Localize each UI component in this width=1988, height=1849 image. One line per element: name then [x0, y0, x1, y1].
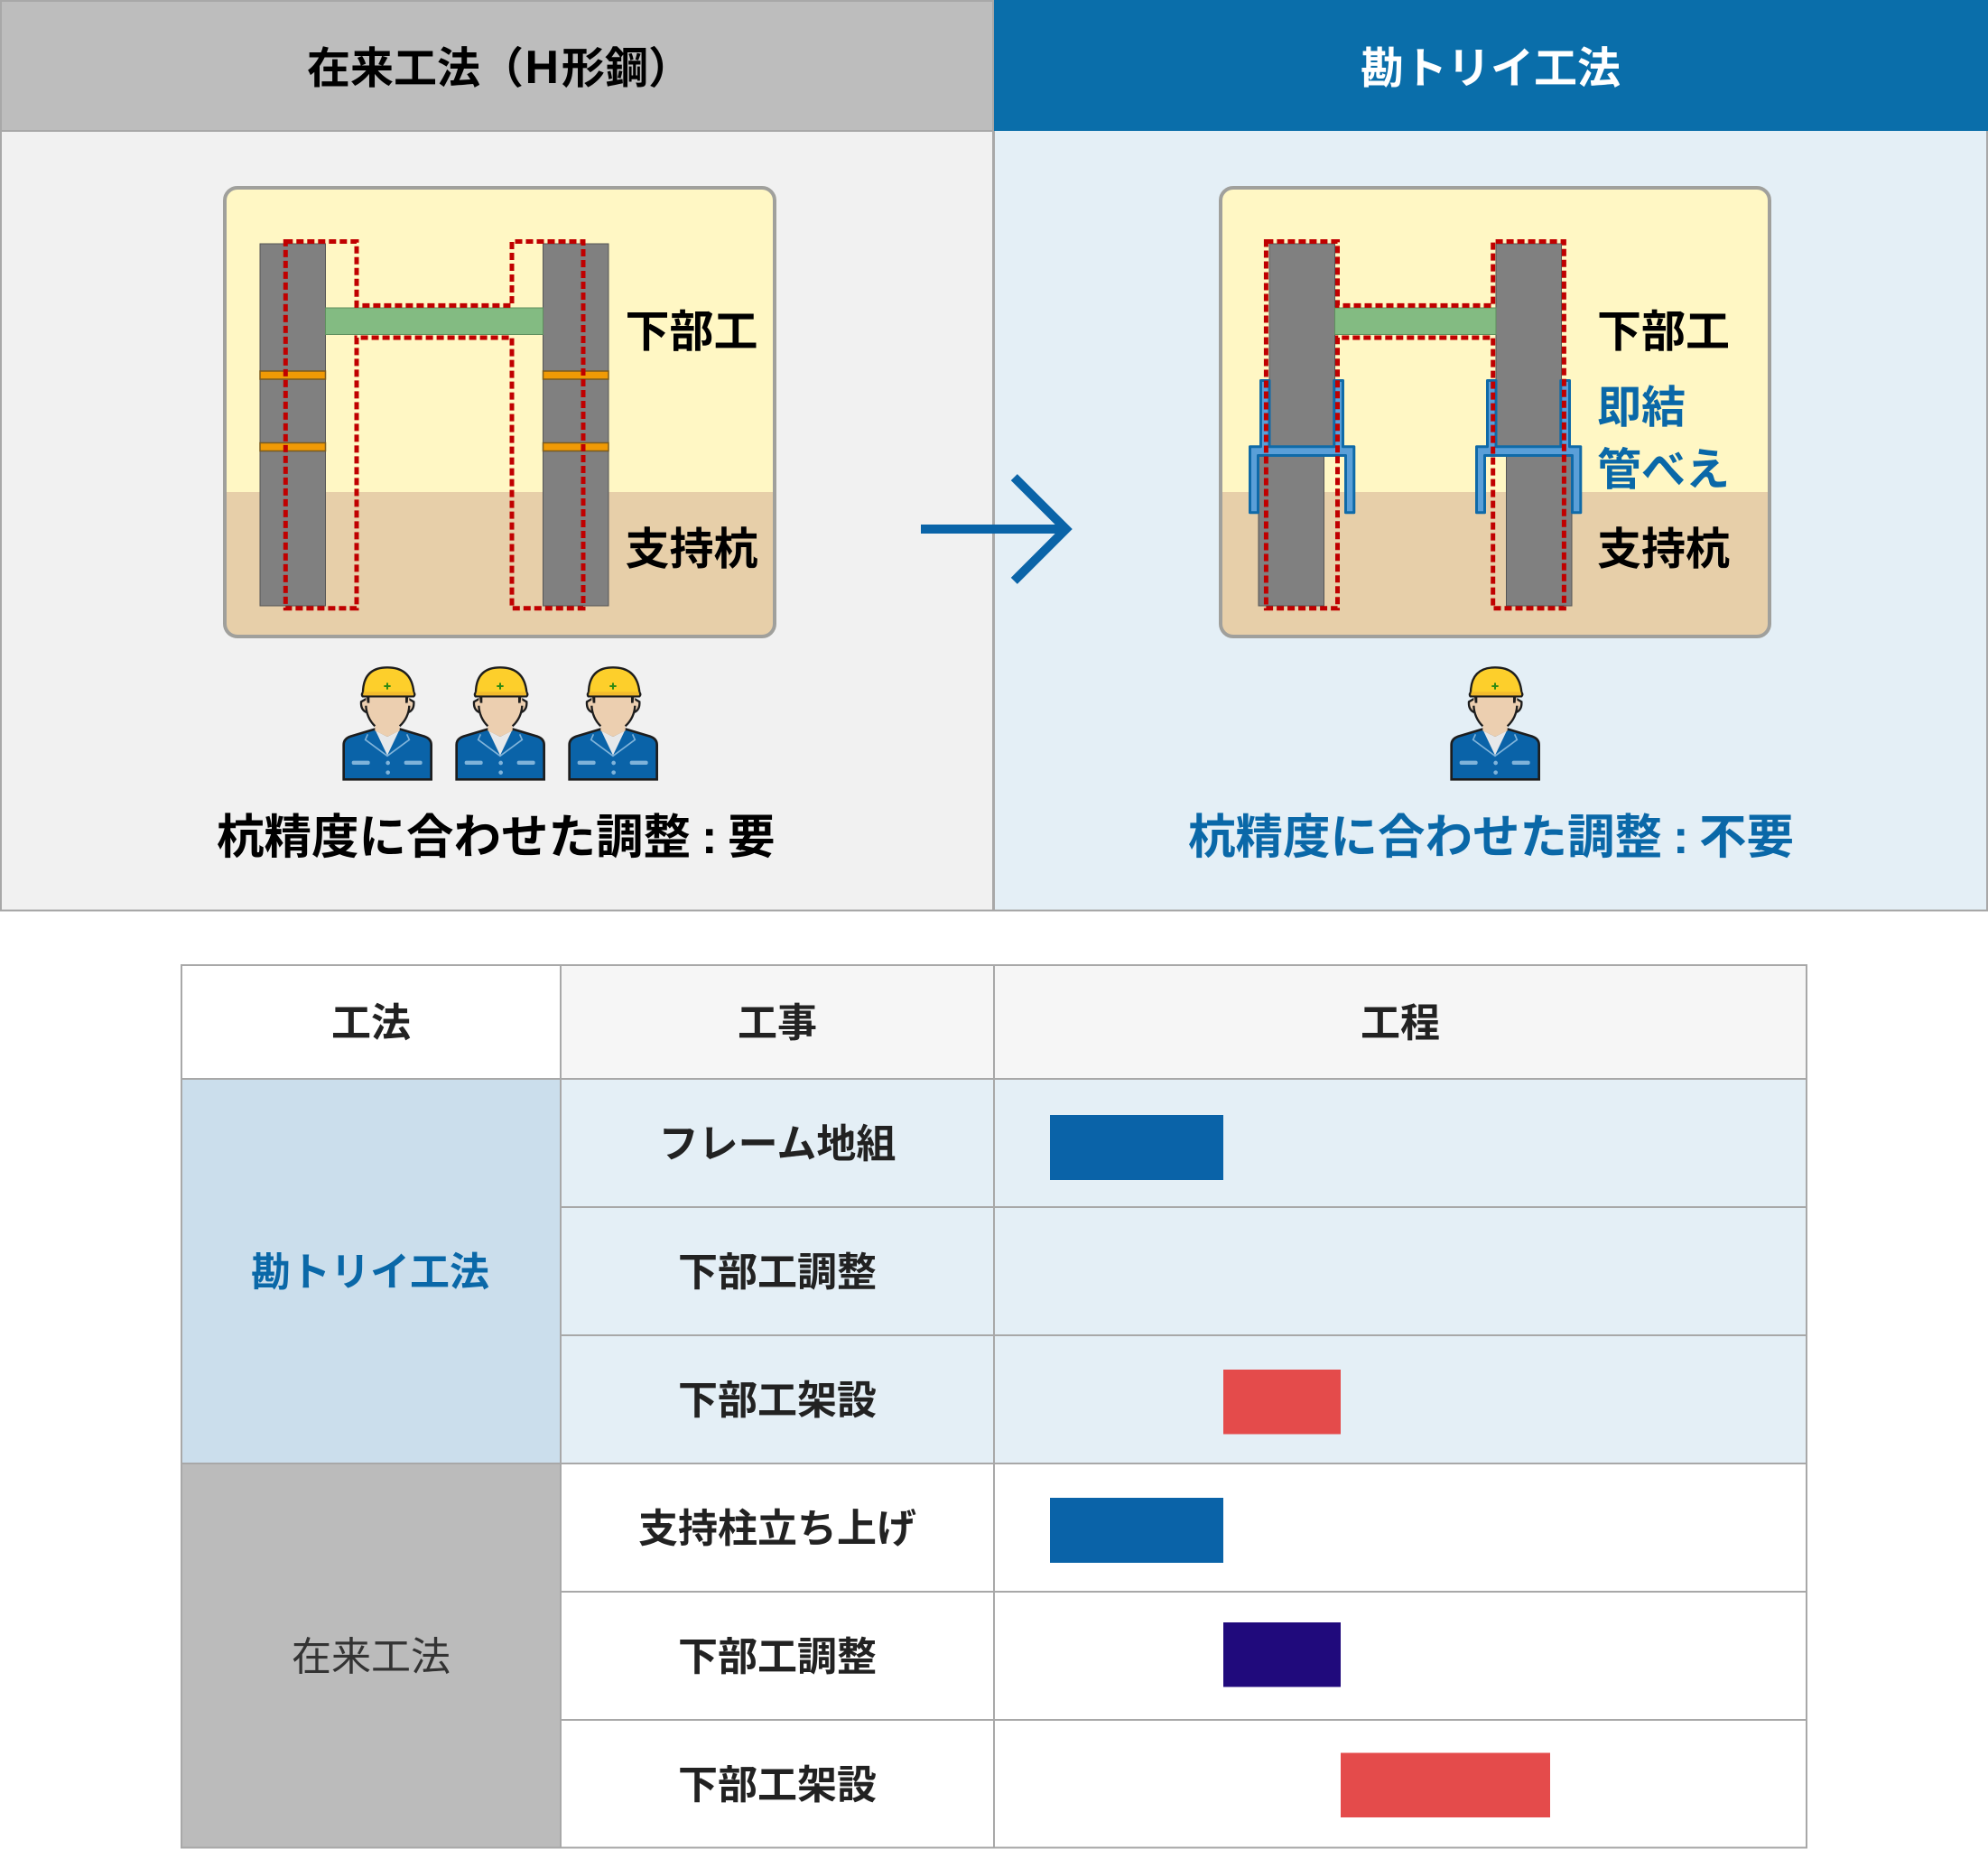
heading: Kantorii method: 勘トリイ工法	[1361, 45, 1621, 93]
work item labels: フレーム地組	[659, 1122, 896, 1166]
arrow: conventional to Kantorii	[921, 478, 1066, 581]
work item labels	[638, 1122, 916, 1807]
caption: adjustment not required: 杭精度に合わせた調整	[1188, 811, 1662, 864]
caption: adjustment required: :	[701, 811, 717, 864]
heading: conventional method: 形鋼）	[562, 45, 692, 93]
label: quick joint: 即結	[1597, 384, 1686, 432]
icon: three workers	[344, 667, 657, 779]
work item labels: 下部工調整	[678, 1635, 877, 1679]
caption: adjustment required: 要	[728, 811, 776, 864]
header row: 工事	[738, 1001, 817, 1045]
work item labels: 支持柱立ち上げ	[638, 1507, 916, 1551]
panel: Kantorii method	[994, 0, 1988, 910]
label: support pile: 支持杭	[1597, 525, 1730, 574]
label: substructure: 下部工	[1597, 308, 1730, 357]
header row	[331, 1001, 1440, 1045]
panel: conventional method	[1, 1, 993, 910]
label: support pile: 支持杭	[625, 525, 758, 574]
caption: adjustment not required: 不要	[1699, 811, 1794, 864]
heading: conventional method: 在来工法（	[307, 45, 524, 93]
gantt bars	[1050, 1115, 1550, 1817]
caption: adjustment not required: :	[1673, 811, 1688, 864]
diagram: conventional structure	[223, 186, 776, 637]
method: conventional: 在来工法	[292, 1635, 451, 1679]
table: schedule comparison	[181, 965, 1807, 1847]
label: substructure: 下部工	[625, 308, 758, 357]
header row: 工法	[331, 1001, 411, 1045]
heading: conventional method	[1, 1, 993, 131]
diagram: Kantorii structure	[1219, 186, 1771, 637]
work item labels: 下部工架設	[678, 1763, 877, 1807]
work item labels: 下部工調整	[678, 1250, 877, 1295]
heading: conventional method: H	[525, 42, 559, 94]
icon: one worker	[1452, 667, 1539, 779]
header row: 工程	[1361, 1001, 1440, 1045]
work item labels: 下部工架設	[678, 1379, 877, 1423]
heading: Kantorii method	[994, 0, 1988, 131]
caption: adjustment required: 杭精度に合わせた調整	[217, 811, 691, 864]
method: Kantorii: 勘トリイ工法	[251, 1250, 489, 1295]
label: sleeve: 管べえ	[1597, 446, 1730, 495]
